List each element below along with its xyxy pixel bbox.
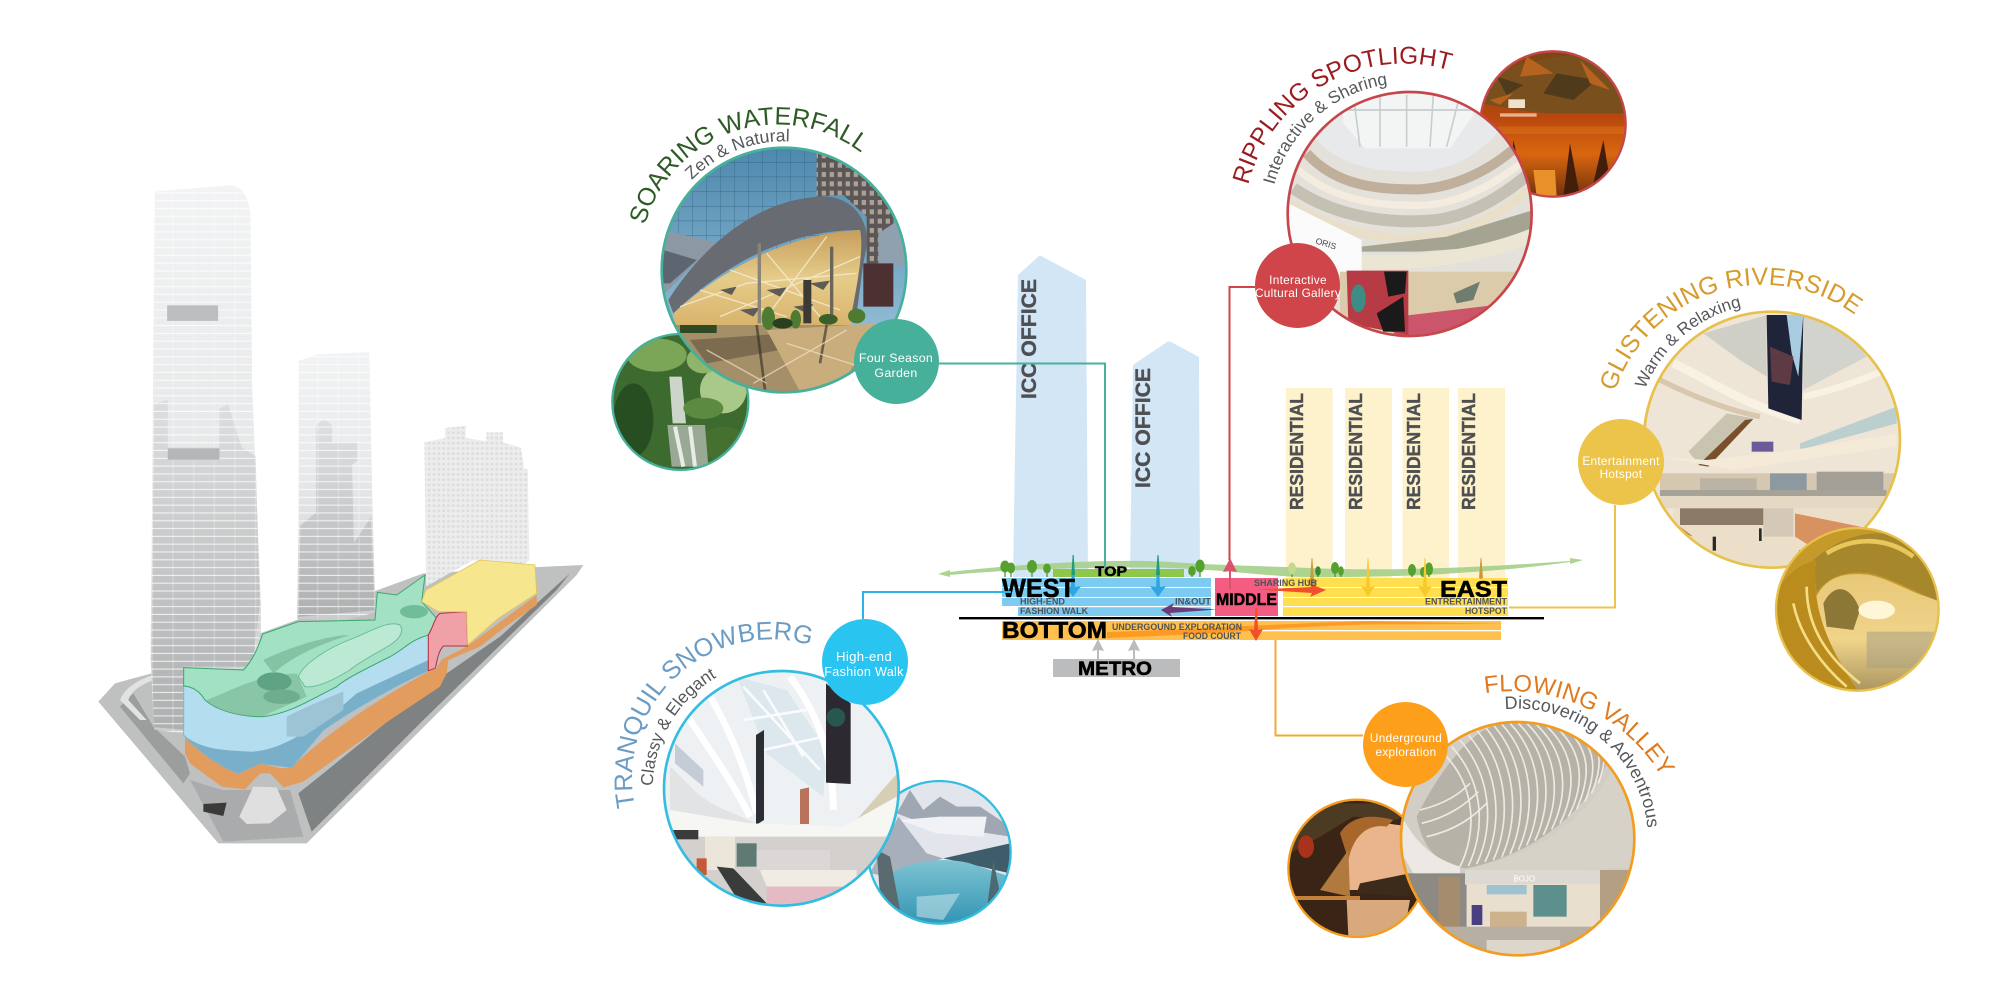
sublabels: FOOD COURT	[1183, 631, 1241, 641]
colored retail zones	[184, 560, 537, 789]
photo: riverside atrium	[1643, 310, 1902, 570]
sublabels: ENTRERTAINMENT	[1425, 596, 1507, 606]
panel: flowing valley	[1287, 674, 1676, 957]
panel: rippling spotlight	[1232, 46, 1627, 338]
callout: high-end fashion walk: Fashion Walk	[824, 665, 904, 679]
labels: residential: RESIDENTIAL	[1346, 393, 1366, 510]
east retail block	[1283, 578, 1508, 616]
arrow: sharing hub right	[1257, 584, 1326, 597]
photo: canopy pavilion	[660, 147, 907, 395]
heading: GLISTENING RIVERSIDE	[1601, 268, 1864, 388]
bottom retail block	[1002, 621, 1508, 640]
callout: high-end fashion walk	[822, 619, 908, 705]
label: icc office middle: ICC OFFICE	[1132, 368, 1155, 488]
callout: interactive cultural gallery	[1255, 243, 1341, 328]
callout: interactive cultural gallery: Interactive	[1269, 273, 1327, 287]
zone: bottom walkway	[185, 595, 537, 789]
photo: autumn lake	[1480, 50, 1627, 198]
leader: entertainment hotspot	[1509, 505, 1615, 608]
subheading: Zen & Natural	[684, 128, 789, 180]
callout: entertainment hotspot: Entertainment	[1582, 454, 1660, 468]
callout: four season garden: Garden	[874, 366, 918, 380]
photo: ribbed ceiling: BOJO	[1513, 875, 1535, 884]
leader: high-end fashion walk	[863, 592, 1011, 619]
green landscape arrow	[938, 558, 1583, 577]
panel: glistening riverside	[1578, 268, 1940, 692]
sublabels: HOTSPOT	[1465, 606, 1507, 616]
sublabels: IN&OUT	[1175, 596, 1211, 606]
photo: cave	[1287, 798, 1428, 938]
photo: ribbed ceiling	[1400, 720, 1638, 957]
photo: circular atrium	[1287, 90, 1533, 338]
building aerial view	[98, 185, 583, 843]
heading: SOARING WATERFALL	[630, 107, 864, 223]
metro box	[1053, 659, 1180, 677]
heading: RIPPLING SPOTLIGHT	[1232, 46, 1454, 184]
photo: circular atrium: ORIS	[1314, 236, 1338, 251]
office tower middle	[1130, 342, 1200, 577]
photo: mountain lake	[867, 780, 1013, 927]
west retail block	[1002, 578, 1211, 616]
heading: FLOWING VALLEY	[1485, 674, 1676, 772]
callout: underground exploration: Underground	[1370, 731, 1442, 745]
panel: tranquil snowberg	[614, 619, 1012, 925]
subheading: Discovering & Adventrous	[1506, 696, 1656, 828]
labels: residential: RESIDENTIAL	[1459, 393, 1479, 510]
callout: four season garden	[854, 319, 939, 404]
panel: soaring waterfall	[611, 107, 939, 472]
office tower large	[151, 185, 261, 734]
callout: four season garden: Four Season	[859, 351, 933, 365]
leader: four season garden	[939, 364, 1105, 568]
zone: middle atrium	[428, 612, 468, 671]
office tower small	[297, 352, 375, 621]
sublabels: FASHION WALK	[1020, 606, 1088, 616]
leader: underground exploration	[1276, 640, 1363, 736]
subheading: Warm & Relaxing	[1634, 298, 1740, 386]
zone labels: MIDDLE	[1216, 590, 1277, 609]
callout: underground exploration	[1363, 702, 1448, 787]
site ground	[98, 565, 583, 843]
zone labels: METRO	[1078, 658, 1152, 680]
photo: golden wave	[1773, 527, 1943, 693]
subheading: Interactive & Sharing	[1263, 76, 1387, 184]
arrows: metro up	[1092, 639, 1140, 659]
arrow: middle up	[1223, 558, 1237, 589]
sublabels: UNDERGOUND EXPLORATION	[1112, 622, 1242, 632]
zone: west retail	[184, 635, 428, 773]
callout: entertainment hotspot	[1578, 419, 1664, 505]
sublabels: SHARING HUB	[1254, 578, 1317, 588]
trees	[1000, 560, 1433, 577]
labels: residential	[1287, 393, 1479, 510]
ground line	[959, 617, 1544, 619]
zone labels: TOP	[1095, 563, 1127, 579]
labels: residential: RESIDENTIAL	[1404, 393, 1424, 510]
sublabels	[1020, 578, 1507, 641]
callout: high-end fashion walk: High-end	[836, 649, 892, 664]
residential towers	[424, 426, 529, 586]
arrows: down to west block	[1065, 555, 1166, 597]
office tower west	[1013, 256, 1088, 577]
zone labels: EAST	[1440, 576, 1507, 602]
label: icc office west: ICC OFFICE	[1018, 279, 1041, 399]
callout: entertainment hotspot: Hotspot	[1600, 467, 1643, 481]
callout: interactive cultural gallery: Cultural Gallery	[1255, 286, 1341, 300]
zone labels: WEST	[1002, 573, 1075, 603]
photo: waterfall	[610, 330, 753, 473]
towers	[151, 185, 529, 734]
zone: top garden	[184, 575, 437, 717]
residential blocks	[1286, 388, 1505, 578]
heading: TRANQUIL SNOWBERG	[614, 622, 812, 809]
middle atrium block	[1215, 578, 1278, 616]
zone: east retail	[422, 560, 537, 645]
arrows: down to east block	[1306, 558, 1485, 597]
leader: interactive cultural gallery	[1230, 287, 1255, 560]
arrow: down to bottom	[1249, 608, 1263, 641]
arrow: in and out left	[1161, 603, 1217, 617]
top garden bar	[1053, 569, 1184, 577]
zone labels: BOTTOM	[1002, 617, 1107, 643]
subheading: Classy & Elegant	[641, 668, 716, 785]
sublabels: HIGH-END	[1020, 596, 1065, 606]
section diagram	[863, 256, 1615, 735]
callout: underground exploration: exploration	[1375, 745, 1437, 759]
labels: residential: RESIDENTIAL	[1287, 393, 1307, 510]
photo: white atrium	[663, 670, 900, 907]
zone labels	[1002, 563, 1507, 680]
